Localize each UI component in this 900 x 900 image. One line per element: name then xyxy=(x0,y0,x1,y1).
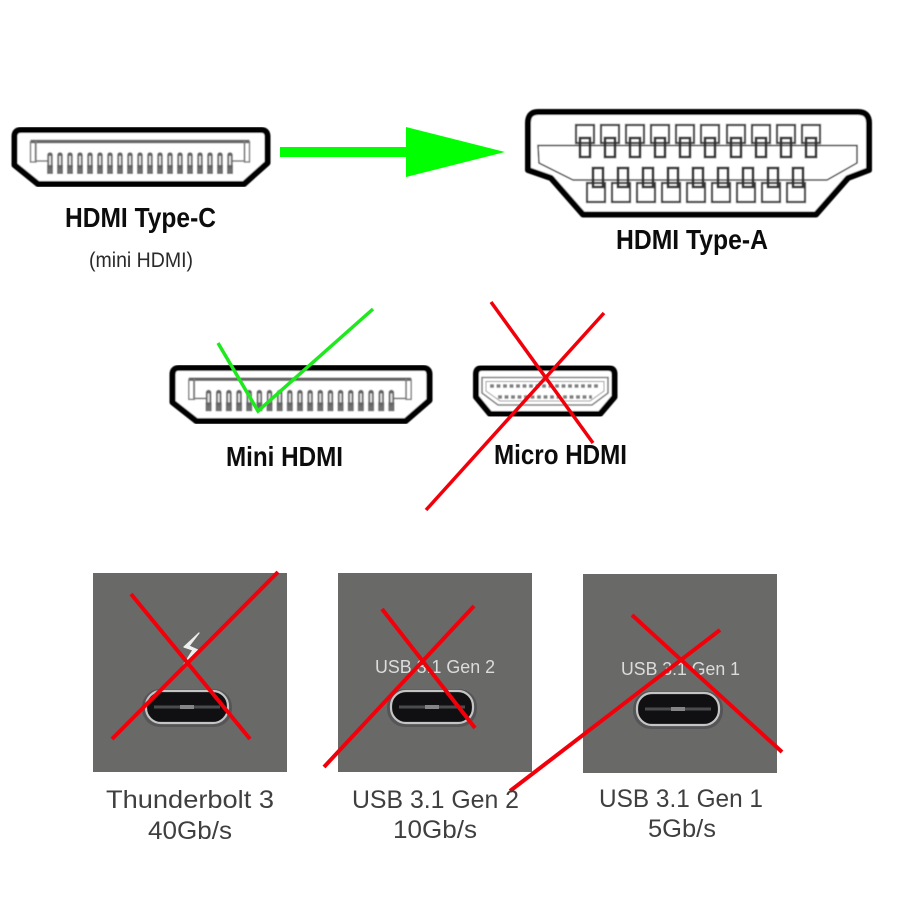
red cross: Micro HDMI xyxy=(426,302,604,510)
caption: 10Gb/s: 10Gb/s xyxy=(393,816,477,844)
label: Mini HDMI: Mini HDMI xyxy=(226,441,343,472)
arrow: Type-C to Type-A xyxy=(280,127,505,177)
caption: Thunderbolt 3: Thunderbolt 3 xyxy=(106,786,274,814)
panel text: USB 3.1 Gen 2: USB 3.1 Gen 2 xyxy=(375,657,495,677)
panel: USB 3.1 Gen 2 xyxy=(338,573,532,772)
port: USB-C Gen 1 xyxy=(633,691,723,729)
connector: Micro HDMI xyxy=(476,368,614,414)
panel text: USB 3.1 Gen 1: USB 3.1 Gen 1 xyxy=(621,659,740,679)
panel: Thunderbolt 3 xyxy=(93,573,287,772)
connector: Mini HDMI xyxy=(173,368,429,421)
red cross: Thunderbolt 3 xyxy=(112,572,278,739)
caption: 5Gb/s: 5Gb/s xyxy=(648,815,716,843)
connector: HDMI Type-A xyxy=(528,112,869,214)
port: USB-C Thunderbolt xyxy=(142,689,232,727)
panel: USB 3.1 Gen 1 xyxy=(583,574,777,773)
label: HDMI Type-A: HDMI Type-A xyxy=(616,224,768,255)
caption: 40Gb/s: 40Gb/s xyxy=(148,817,232,845)
caption: USB 3.1 Gen 2: USB 3.1 Gen 2 xyxy=(352,786,519,814)
caption: USB 3.1 Gen 1: USB 3.1 Gen 1 xyxy=(599,785,763,813)
label: mini HDMI: (mini HDMI) xyxy=(89,249,193,272)
connector: HDMI Type-C xyxy=(14,130,268,184)
port: USB-C Gen 2 xyxy=(387,689,477,727)
label: Micro HDMI: Micro HDMI xyxy=(494,439,627,470)
green check mark xyxy=(218,309,373,411)
red cross: USB 3.1 Gen 1 xyxy=(510,615,782,791)
red cross: USB 3.1 Gen 2 xyxy=(324,606,475,767)
icon: lightning bolt xyxy=(181,633,199,669)
label: HDMI Type-C: HDMI Type-C xyxy=(65,202,216,233)
